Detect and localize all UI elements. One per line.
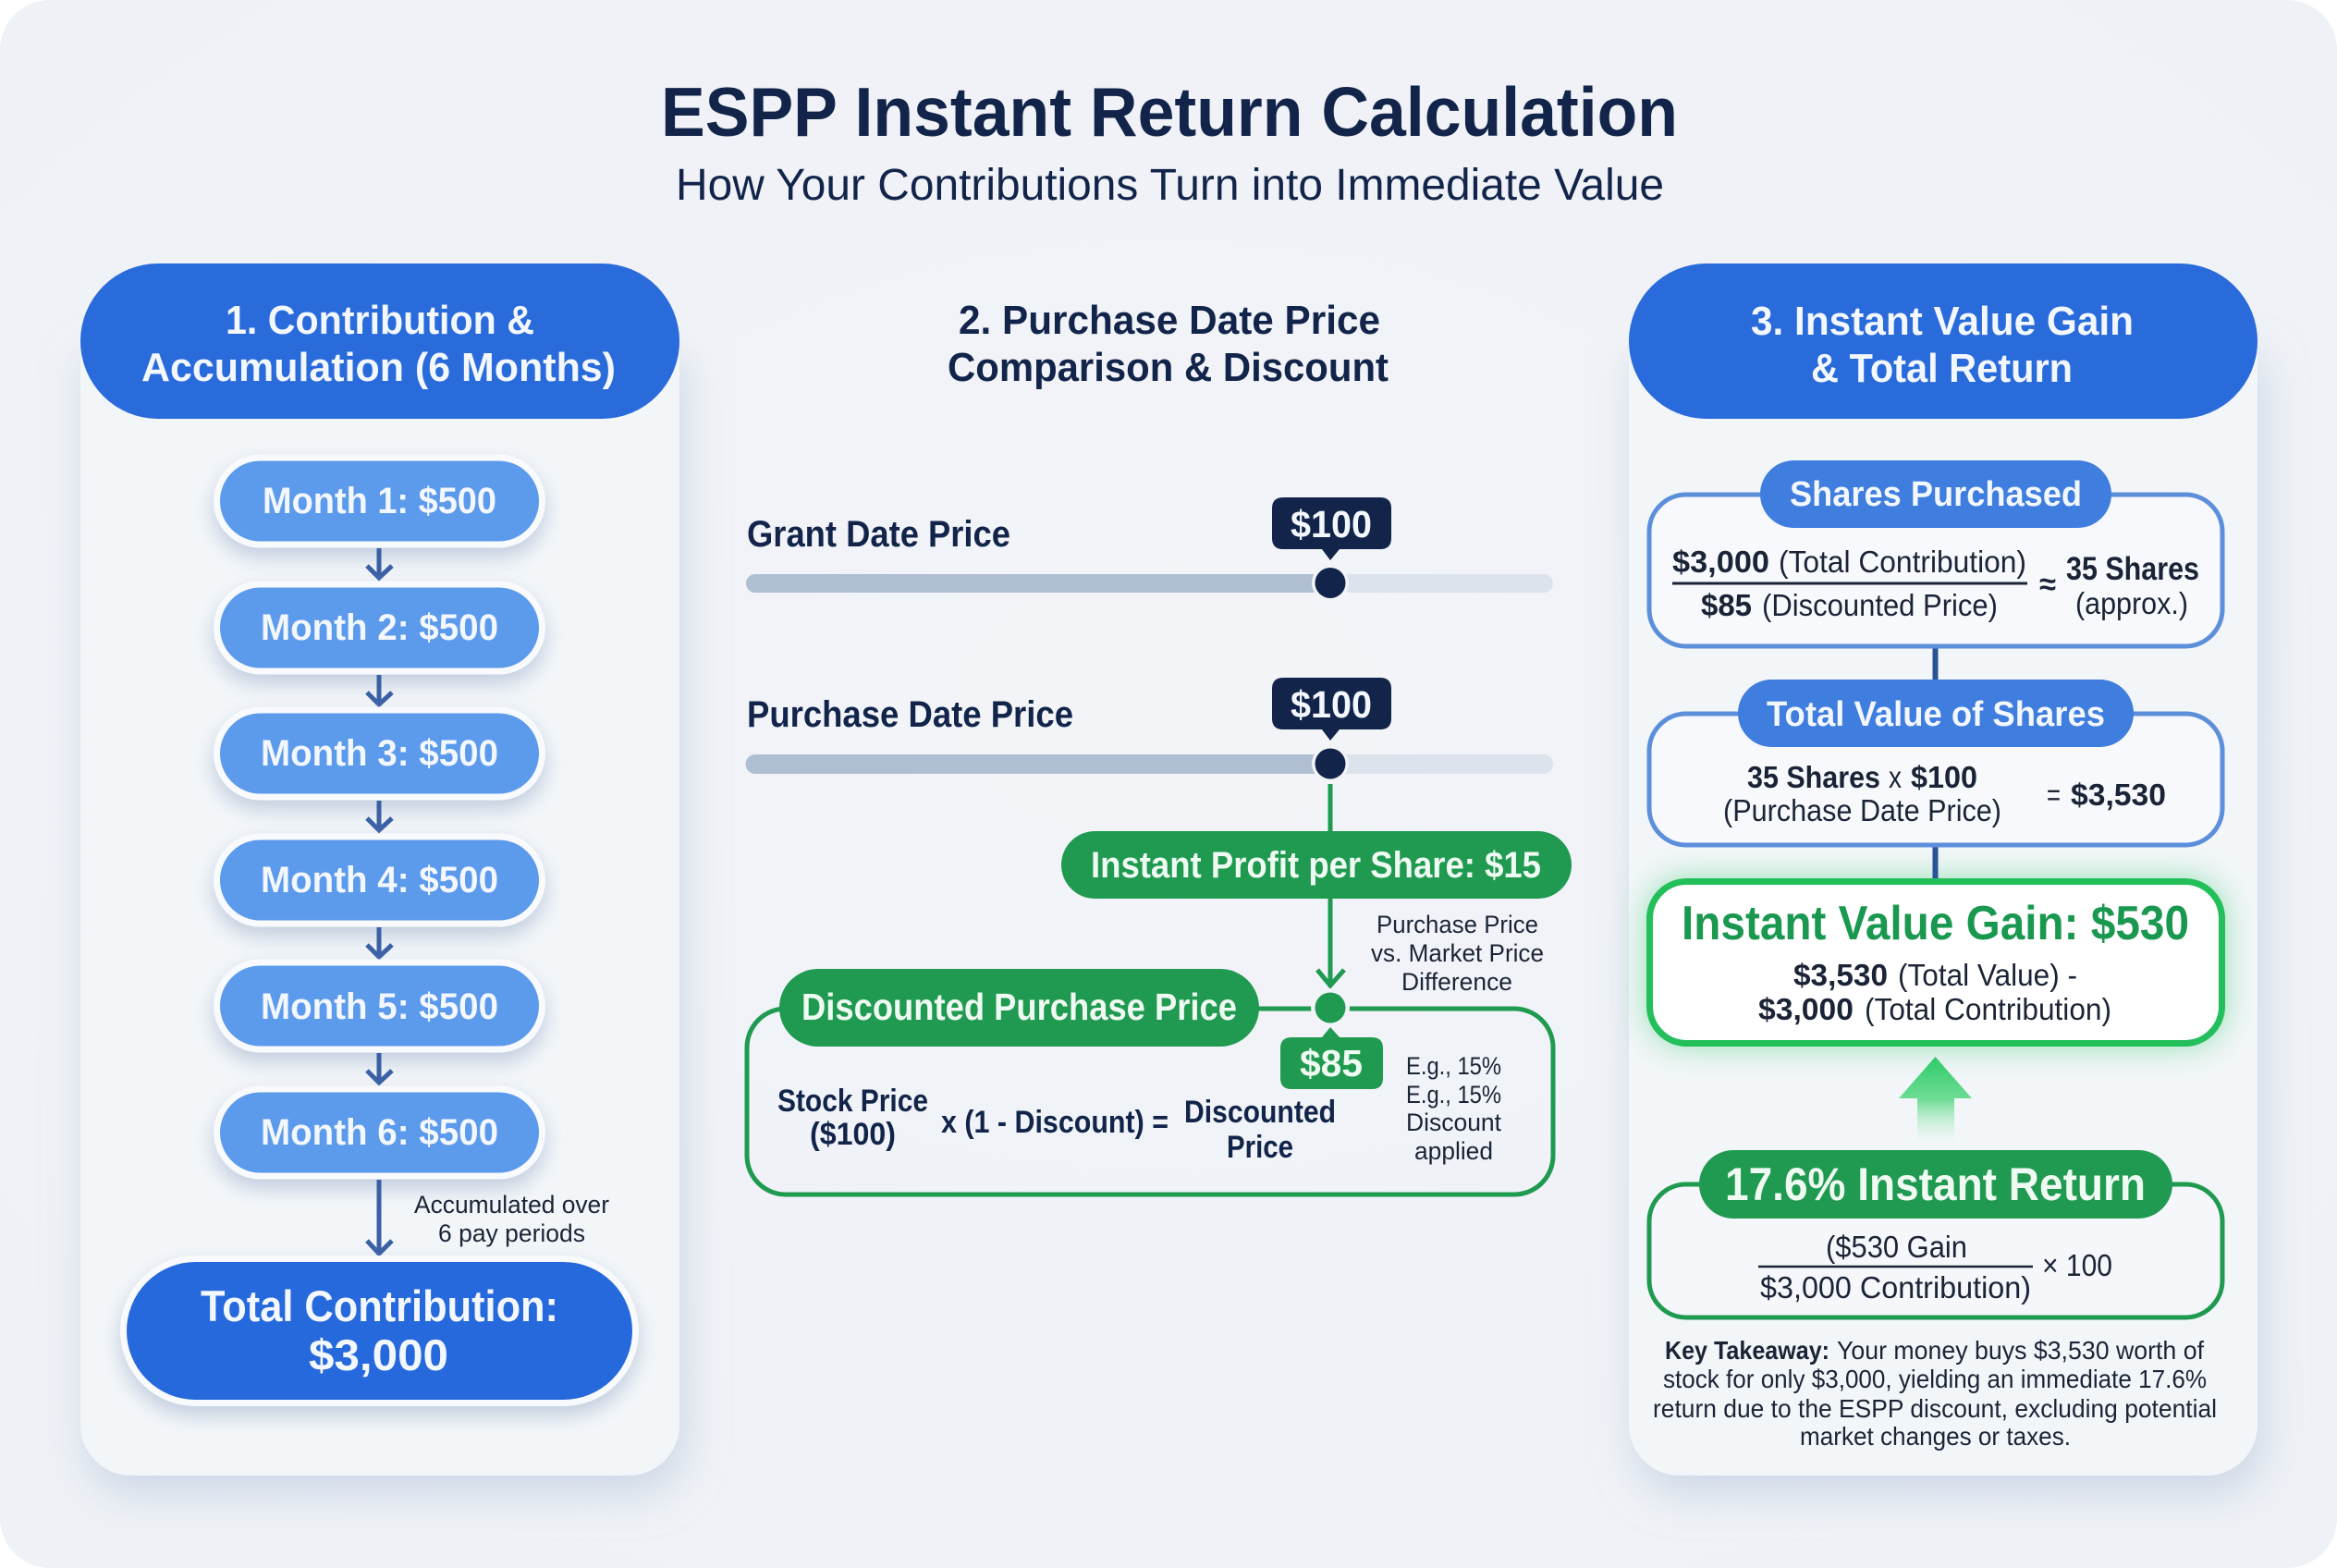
panel header left: 1. Contribution & (226, 298, 534, 343)
shares formula: $3,000 (1672, 545, 1769, 579)
connector shares to value (1932, 646, 1938, 684)
month 4 pill (216, 837, 542, 924)
month 1 pill: Month 1: $500 (263, 481, 496, 521)
discount formula: ($100) (810, 1117, 896, 1152)
month 6 pill (216, 1089, 542, 1176)
discounted purchase price pill (779, 969, 1259, 1047)
total value pill (1738, 680, 2134, 747)
shares formula: ≈ (2039, 567, 2056, 601)
price difference note (1371, 911, 1544, 996)
key takeaway (1653, 1336, 2217, 1451)
section heading middle: 2. Purchase Date Price (959, 298, 1380, 343)
green connector to profit pill (1328, 784, 1333, 832)
panel background right (1629, 341, 2257, 1476)
total value pill: Total Value of Shares (1767, 695, 2105, 734)
return formula: × 100 (2042, 1248, 2112, 1282)
month 2 pill: Month 2: $500 (261, 607, 498, 648)
key takeaway: market changes or taxes. (1800, 1422, 2071, 1451)
instant profit pill: Instant Profit per Share: $15 (1091, 845, 1541, 886)
discount note: E.g., 15% (1406, 1081, 1501, 1109)
discount formula: Stock Price (777, 1084, 928, 1119)
instant value gain glow (1646, 878, 2225, 1047)
price difference note: Purchase Price (1377, 911, 1538, 938)
instant return pill: 17.6% Instant Return (1725, 1158, 2146, 1210)
discounted purchase price box (747, 1009, 1553, 1194)
total value formula: 35 Shares (1747, 760, 1880, 794)
up arrow (1899, 1057, 1972, 1143)
return formula (1758, 1230, 2112, 1305)
month 6 pill: Month 6: $500 (261, 1112, 498, 1153)
discounted purchase price pill: Discounted Purchase Price (801, 986, 1237, 1028)
accumulated note: 6 pay periods (438, 1219, 585, 1247)
connector value to gain (1932, 845, 1938, 880)
month 4 pill: Month 4: $500 (261, 860, 498, 900)
month 5 pill (216, 962, 542, 1049)
instant value gain box: $3,000 (1758, 992, 1854, 1026)
title: ESPP Instant Return Calculation (661, 73, 1678, 151)
key takeaway: Your money buys $3,530 worth of (1837, 1336, 2204, 1365)
panel: 1. contribution and accumulation (80, 263, 679, 1476)
instant value gain box: Instant Value Gain: $530 (1682, 897, 2189, 950)
discounted price dot (1311, 988, 1350, 1027)
month 3 pill (216, 710, 542, 797)
purchase date slider (745, 745, 1553, 782)
shares formula: (approx.) (2075, 586, 2188, 620)
instant value gain box: (Total Contribution) (1865, 992, 2111, 1026)
discount formula: Discounted (1184, 1095, 1336, 1130)
purchase date price bubble: $100 (1291, 683, 1372, 726)
discount formula: Price (1227, 1130, 1293, 1165)
instant value gain box: (Total Value) - (1898, 958, 2077, 992)
grant date price bubble: $100 (1291, 503, 1372, 545)
grant date price bubble (1272, 497, 1391, 560)
discount formula (777, 1084, 1336, 1165)
shares purchased pill: Shares Purchased (1790, 475, 2082, 514)
key takeaway: return due to the ESPP discount, excluding potential (1653, 1394, 2217, 1423)
instant value gain box: $3,530 (1793, 958, 1888, 992)
total value formula (1723, 760, 2166, 827)
discount formula: x (1 - Discount) = (941, 1105, 1168, 1140)
shares purchased box (1649, 460, 2222, 646)
total contribution pill: $3,000 (309, 1330, 448, 1379)
total value formula: x (1889, 760, 1902, 794)
key takeaway: Key Takeaway: (1665, 1336, 1829, 1365)
instant profit pill (1061, 831, 1572, 899)
total value formula: = (2047, 778, 2061, 812)
arrow month 4 to 5 (367, 927, 392, 958)
month 3 pill: Month 3: $500 (261, 733, 498, 774)
panel: 3. instant value gain and total return (1629, 263, 2257, 1476)
grant date slider (746, 564, 1553, 601)
shares purchased pill (1760, 460, 2111, 528)
grant date label: Grant Date Price (747, 514, 1010, 555)
arrow month 5 to 6 (367, 1053, 392, 1084)
purchase date label: Purchase Date Price (747, 694, 1073, 735)
month 1 pill (216, 458, 542, 545)
discount note (1406, 1052, 1501, 1165)
total value formula: $3,530 (2071, 778, 2166, 812)
total value formula: $100 (1911, 760, 1977, 794)
arrow month 6 to total (367, 1180, 392, 1254)
shares formula: $85 (1701, 588, 1752, 622)
total value of shares box (1649, 680, 2222, 845)
section heading middle (948, 298, 1389, 390)
shares formula (1672, 545, 2199, 622)
panel: 2. purchase date price comparison (745, 298, 1572, 1194)
total contribution pill (124, 1259, 636, 1403)
shares formula: (Total Contribution) (1779, 545, 2026, 579)
key takeaway: stock for only $3,000, yielding an immediate 17.6% (1663, 1365, 2207, 1393)
accumulated note (414, 1191, 609, 1247)
panel header right: 3. Instant Value Gain (1751, 299, 2134, 344)
shares formula: 35 Shares (2066, 551, 2199, 587)
panel header left (80, 263, 679, 419)
subtitle: How Your Contributions Turn into Immediate Value (676, 161, 1664, 210)
price difference note: Difference (1401, 968, 1512, 996)
discounted price bubble: $85 (1300, 1042, 1363, 1084)
total value formula: (Purchase Date Price) (1723, 793, 2001, 827)
return formula: ($530 Gain (1826, 1230, 1967, 1264)
purchase date price bubble (1272, 678, 1391, 741)
panel header right (1629, 263, 2257, 419)
discount note: E.g., 15% (1406, 1052, 1501, 1080)
section heading middle: Comparison & Discount (948, 345, 1389, 390)
instant value gain box (1649, 882, 2222, 1043)
month 5 pill: Month 5: $500 (261, 986, 498, 1027)
arrow month 2 to 3 (367, 675, 392, 705)
accumulated note: Accumulated over (414, 1191, 609, 1219)
month 2 pill (216, 584, 542, 671)
total contribution pill: Total Contribution: (201, 1281, 558, 1330)
price difference note: vs. Market Price (1371, 939, 1544, 967)
discounted price bubble (1280, 1027, 1383, 1089)
return formula: $3,000 Contribution) (1760, 1270, 2031, 1305)
discount note: Discount (1406, 1109, 1501, 1136)
panel header left: Accumulation (6 Months) (141, 345, 616, 390)
shares formula: (Discounted Price) (1762, 588, 1998, 622)
arrow month 1 to 2 (367, 548, 392, 579)
discount note: applied (1414, 1137, 1493, 1165)
panel header right: & Total Return (1811, 346, 2073, 391)
panel background left (80, 341, 679, 1476)
instant return box (1649, 1150, 2222, 1317)
arrow month 3 to 4 (367, 801, 392, 831)
arrow profit to dot (1317, 899, 1344, 986)
